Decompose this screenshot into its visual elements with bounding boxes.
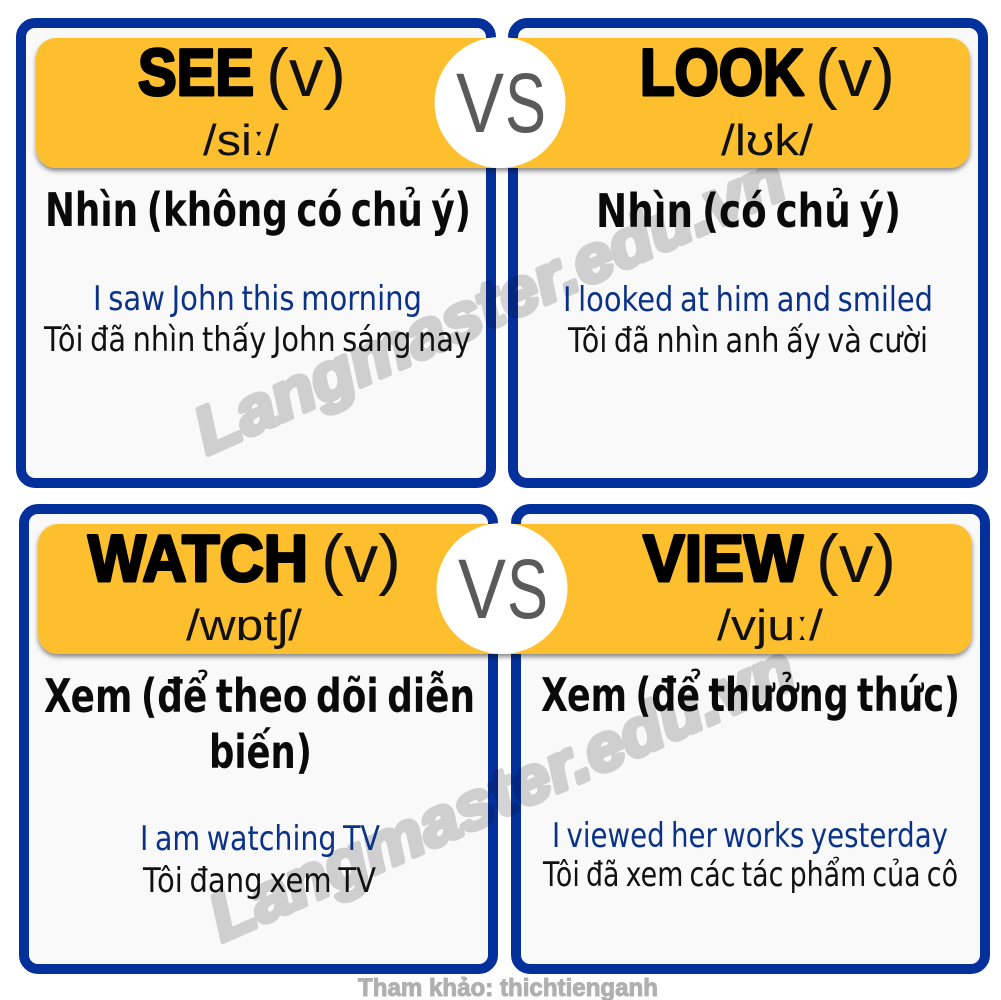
vs badge: bottom: V <box>458 542 506 636</box>
vs badge: top <box>434 37 566 168</box>
phonetic: see: /siː/ <box>203 116 280 165</box>
panel: watch <box>24 509 493 969</box>
banner: bottom <box>38 524 972 654</box>
heading: view: VIEW <box>643 521 804 595</box>
meaning: look: Nhìn (có chủ ý) <box>596 184 901 238</box>
vs badge: top: V <box>456 56 504 150</box>
meaning: watch <box>44 669 475 779</box>
example: look <box>563 280 933 361</box>
meaning: see: Nhìn (không có chủ ý) <box>45 183 471 237</box>
banner: top <box>36 38 970 168</box>
example: look: Tôi đã nhìn anh ấy và cười <box>567 321 928 361</box>
heading: look: LOOK <box>640 35 804 109</box>
example: watch: Tôi đang xem TV <box>142 861 376 901</box>
example: watch <box>140 819 380 901</box>
heading: see: (v) <box>266 35 346 111</box>
example: look: I looked at him and smiled <box>563 280 933 320</box>
meaning: watch: biến) <box>209 725 312 779</box>
panel: see <box>21 23 491 483</box>
example: see: Tôi đã nhìn thấy John sáng nay <box>43 320 471 360</box>
example: see: I saw John this morning <box>93 279 422 319</box>
example: view <box>542 816 958 895</box>
phonetic: view: /vjuː/ <box>717 601 824 650</box>
heading: view: (v) <box>816 521 896 597</box>
example: watch: I am watching TV <box>140 819 380 859</box>
phonetic: watch: /wɒtʃ/ <box>186 601 303 650</box>
vs badge: bottom: S <box>507 542 548 636</box>
heading: look: (v) <box>815 35 895 111</box>
phonetic: look: /lʊk/ <box>721 116 814 165</box>
heading: watch: (v) <box>321 521 401 597</box>
panel: look <box>513 23 983 483</box>
watermark: top: Langmaster.edu.vn <box>183 141 796 468</box>
vs badge: bottom <box>436 523 568 654</box>
vs badge: top: S <box>505 56 546 150</box>
heading: watch: WATCH <box>88 521 308 595</box>
heading: see <box>138 35 346 111</box>
watermark: bottom: Langmaster.edu.vn <box>198 630 805 955</box>
meaning: watch: Xem (để theo dõi diễn <box>44 669 475 723</box>
panel: view <box>516 509 985 969</box>
heading: see: SEE <box>138 35 254 109</box>
heading: view <box>643 521 896 597</box>
example: see <box>43 279 471 360</box>
